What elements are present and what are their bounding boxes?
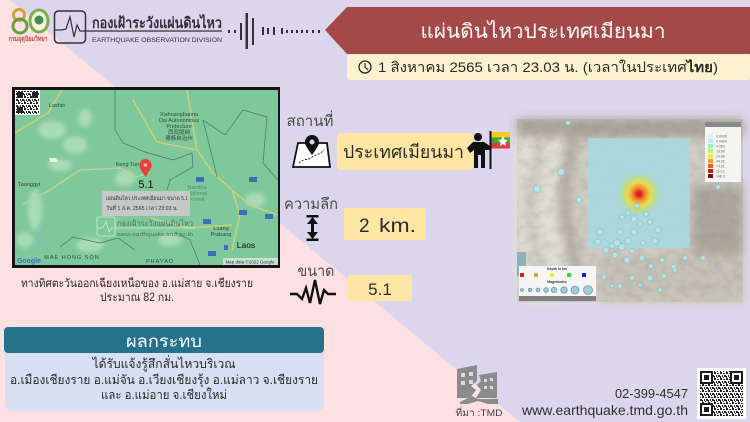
waveform decoration	[228, 13, 320, 49]
map place labels: Namtha	[187, 185, 208, 191]
map place labels: MAE HONG SON	[44, 255, 100, 261]
intensity legend: 0.0494	[716, 140, 727, 144]
icon: person with Myanmar flag	[467, 131, 510, 169]
logo: earthquake observation division	[54, 11, 222, 44]
intensity legend: 0.0098	[716, 134, 727, 138]
contact details: 02-399-4547	[615, 387, 688, 401]
impact heading	[4, 327, 324, 353]
logo: earthquake observation division: กองเฝ้าระวังแผ่นดินไหว	[92, 13, 222, 32]
shake intensity square	[588, 138, 690, 248]
map watermark: กองเฝ้าระวังแผ่นดินไหว	[117, 219, 193, 228]
map place labels: National	[187, 191, 207, 197]
map place labels: Prefecture	[166, 124, 192, 130]
magnitude label: ขนาด	[298, 263, 334, 280]
map pin	[138, 159, 154, 191]
map direction caption	[21, 277, 253, 304]
depth label: ความลึก	[284, 196, 338, 213]
depth value: km.	[379, 216, 416, 237]
logo: 80th anniversary emblem: กรมอุตุนิยมวิทยา	[8, 35, 48, 43]
contact details: www.earthquake.tmd.go.th	[521, 402, 688, 418]
map place labels: Forest	[189, 197, 205, 203]
impact body	[5, 345, 324, 411]
map place labels: Lashio	[49, 103, 65, 109]
felt report markers	[534, 120, 720, 292]
depth and magnitude legend	[519, 266, 596, 301]
map direction caption: ประมาณ 82 กม.	[100, 292, 174, 304]
map panel: epicentre location: Laos	[237, 240, 255, 250]
map QR code	[15, 90, 40, 115]
map place labels: Dai Autonomous	[159, 118, 199, 124]
map watermark: www.earthquake.tmd.go.th	[117, 232, 193, 238]
intensity legend: 110.3	[716, 170, 725, 174]
map pin: 5.1	[138, 179, 154, 191]
impact body: และ อ.แม่อาย จ.เชียงใหม่	[101, 388, 227, 402]
map caption box: วันที่ 1 ส.ค. 2565 เวลา 23:03 น.	[106, 204, 178, 212]
map place labels: Luang	[213, 226, 229, 232]
intensity legend: 24.66	[716, 154, 725, 158]
impact heading: ผลกระทบ	[126, 332, 202, 351]
map direction caption: ทางทิศตะวันออกเฉียงเหนือของ อ.แม่สาย จ.เชียงราย	[21, 277, 253, 290]
impact body: อ.เมืองเชียงราย อ.แม่จัน อ.เวียงเชียงรุ้ง อ.แม่ลาว จ.เชียงราย	[10, 373, 318, 388]
map place labels: Xishuangbanna	[160, 112, 199, 118]
shake map panel	[517, 119, 743, 302]
logo: earthquake observation division: EARTHQUAKE OBSERVATION DIVISION	[92, 37, 222, 44]
panel: impact	[4, 327, 324, 411]
icon: seismic wave	[290, 280, 336, 304]
map place labels: 傣族自治州	[165, 134, 193, 142]
intensity legend: 4.953	[716, 144, 725, 148]
date and time bar: 1 สิงหาคม 2565 เวลา 23.03 น. (เวลาในประเทศ ไทย)	[378, 58, 718, 75]
intensity legend: 148.3	[716, 174, 725, 178]
map place labels: Keng Tung	[116, 162, 142, 168]
map place labels	[18, 103, 231, 265]
depth value: 2	[359, 216, 370, 237]
intensity legend: 13.09	[716, 150, 725, 154]
map watermark	[97, 217, 195, 238]
location label: สถานที่	[286, 110, 334, 130]
depth and magnitude legend: Magnitudes	[547, 280, 567, 284]
location value	[337, 133, 473, 170]
date and time bar	[347, 54, 750, 80]
title banner: แผ่นดินไหวประเทศเมียนมา	[420, 20, 666, 43]
intensity legend: 74.51	[716, 164, 725, 168]
source credit: ที่มา :TMD	[456, 406, 503, 419]
icon: map pin on map	[293, 135, 330, 167]
intensity legend: 44.02	[716, 160, 725, 164]
contact details	[521, 387, 688, 418]
intensity legend	[705, 122, 741, 182]
map caption box: แผ่นดินไหว ประเทศเมียนมา ขนาด 5.1	[106, 195, 188, 202]
depth and magnitude legend: Depth in km	[547, 267, 567, 271]
map panel: epicentre location: Google	[17, 258, 41, 265]
map place labels: Taunggyi	[18, 182, 40, 188]
location value: ประเทศเมียนมา	[343, 142, 464, 162]
map panel: epicentre location: Map data ©2022 Google	[225, 258, 275, 264]
QR code	[697, 368, 746, 419]
magnitude value	[348, 275, 412, 301]
map place labels: PHAYAO	[146, 259, 174, 265]
map place labels: 西双版纳	[168, 128, 190, 136]
logo: 80th anniversary emblem	[8, 10, 48, 43]
title banner	[325, 7, 750, 54]
map caption box	[102, 191, 190, 216]
icon: damaged buildings	[457, 365, 498, 404]
map place labels: Prabang	[211, 232, 231, 238]
map panel: epicentre location	[12, 87, 280, 268]
magnitude value: 5.1	[368, 280, 392, 299]
icon: depth arrow	[306, 215, 318, 241]
impact body: ได้รับแจ้งรู้สึกสั่นไหวบริเวณ	[92, 355, 236, 372]
depth value	[344, 208, 426, 240]
